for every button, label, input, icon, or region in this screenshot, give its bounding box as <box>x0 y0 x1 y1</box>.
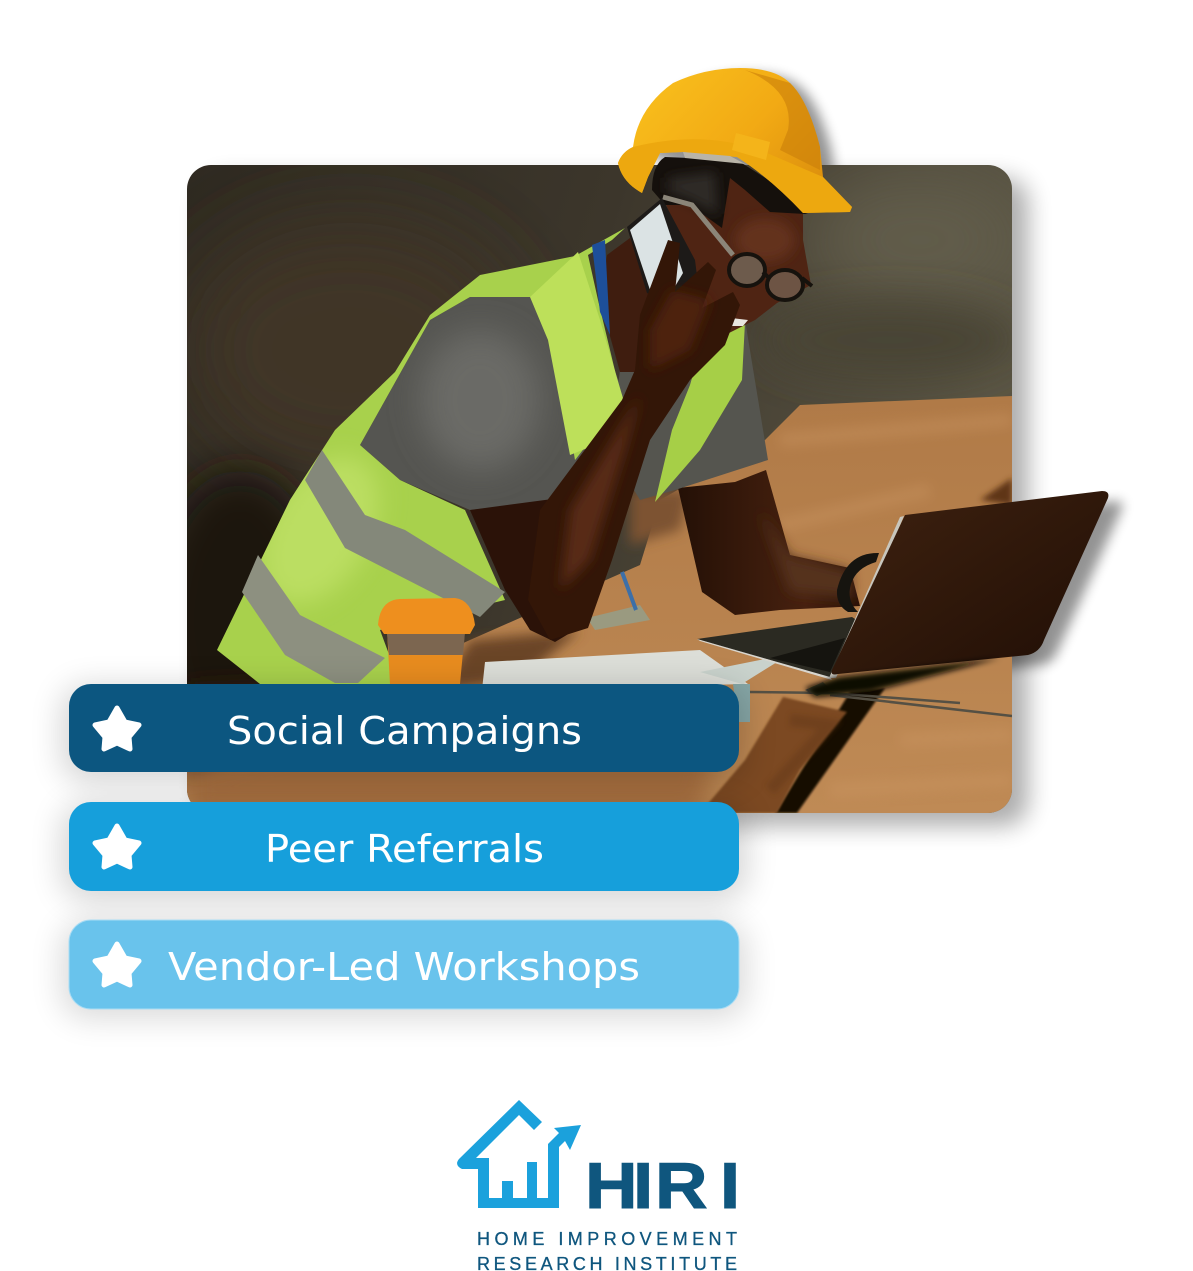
panel: Social Campaigns bar <box>69 684 739 772</box>
icon: watch <box>837 553 879 612</box>
label: Social Campaigns: Social Campaigns <box>227 709 582 753</box>
worker: head and face <box>652 157 823 335</box>
label: Vendor-Led Workshops: Vendor-Led Workshops <box>168 945 640 989</box>
glasses <box>663 197 812 300</box>
worker: right arm <box>678 470 860 615</box>
worker: lanyard <box>592 240 610 335</box>
laptop <box>697 491 1108 697</box>
icon: smartphone <box>627 198 700 300</box>
tagline line 1: HOME IMPROVEMENT <box>477 1229 737 1249</box>
icon: star <box>95 708 139 749</box>
photo background and workbench <box>150 165 1040 813</box>
worker: raised arm and hand <box>470 240 740 642</box>
icon: star <box>95 826 139 867</box>
wordmark: HIRI: HIRI <box>585 1150 740 1222</box>
worker: neck <box>600 238 652 372</box>
label: Peer Referrals: Peer Referrals <box>265 827 544 871</box>
bar shadows <box>62 686 746 1018</box>
worker: shirt <box>360 297 768 510</box>
wire on table <box>750 692 1012 716</box>
panel: Vendor-Led Workshops bar <box>69 920 739 1009</box>
hard hat <box>618 68 852 213</box>
icon: house with rising bars and arrow <box>457 1100 581 1208</box>
photo panel shadow <box>203 74 1122 826</box>
papers <box>482 650 748 685</box>
panel: worker photo <box>150 68 1108 813</box>
icon: star <box>95 944 139 985</box>
logo: HIRI <box>457 1100 740 1271</box>
coffee cup <box>378 598 475 684</box>
worker: high-visibility vest <box>217 228 745 684</box>
reflective stripes <box>305 450 505 617</box>
panel: Peer Referrals bar <box>69 802 739 891</box>
wood fold and crack <box>775 688 885 813</box>
